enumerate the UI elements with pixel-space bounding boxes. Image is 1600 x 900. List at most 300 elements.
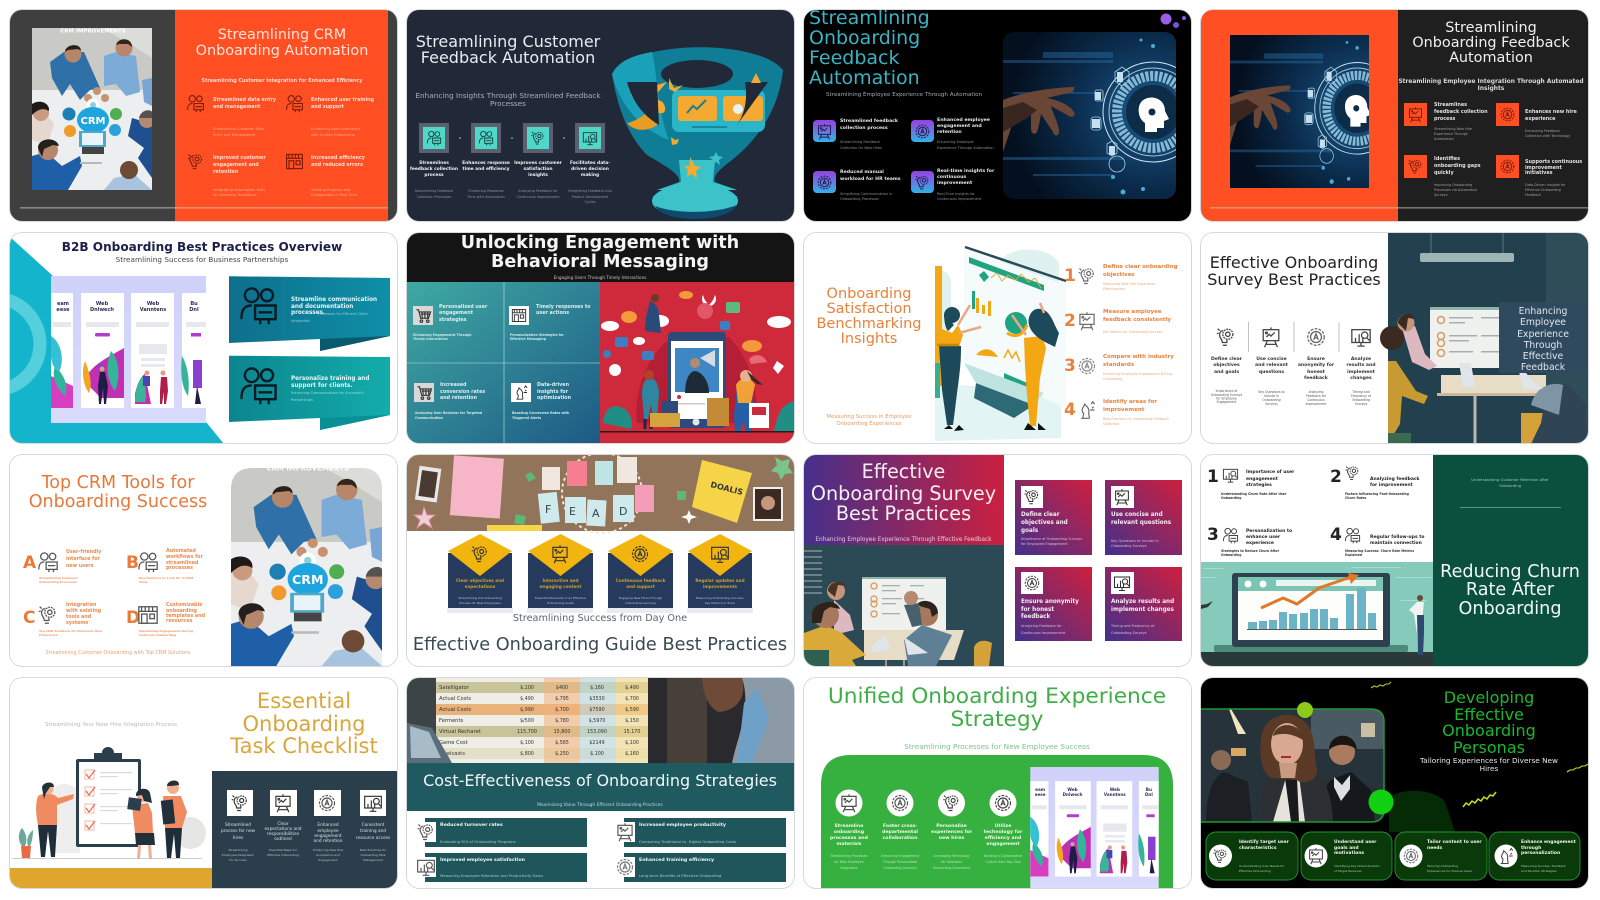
title: Task Checklist	[229, 734, 378, 758]
slide card: Reducing Churn Rate After Onboarding	[1201, 455, 1588, 666]
four survey columns: Use concise	[1256, 356, 1287, 362]
four gold-and-navy cards: Process for New Employees	[459, 601, 501, 605]
lettered tools grid: resources	[166, 618, 193, 624]
strategy columns: onboarding	[834, 828, 864, 834]
persona steps: of Target Personas	[1334, 868, 1362, 872]
photo: spreadsheet and businessman: Game Cost	[439, 740, 468, 746]
dark checklist panel: Enhanced	[317, 822, 339, 828]
numbered list: Best Practices for Onboarding Feedback	[1103, 416, 1169, 420]
green panel	[821, 754, 1173, 888]
numbered list	[1064, 264, 1178, 426]
strategy columns	[830, 789, 1023, 870]
callout: enhancing employee experience: Experience	[1517, 328, 1569, 340]
numbered strategies: Churn Rates	[1345, 496, 1367, 500]
photo: corkboard with sticky notes: A	[592, 507, 600, 520]
slide card: Effective Onboarding Guide Best Practices	[407, 455, 794, 666]
photo: spreadsheet and businessman: 153,090	[587, 728, 607, 734]
four survey columns: Define clear	[1211, 356, 1243, 362]
decorative squiggles	[1371, 682, 1588, 806]
step labels: Collection Processes	[417, 195, 452, 199]
benefit grid	[188, 96, 375, 197]
persona steps: Understanding User Needs for	[1239, 864, 1285, 868]
banner: communication	[229, 276, 390, 350]
four survey columns: Timing and	[1351, 390, 1370, 394]
strategy columns: Integration	[840, 866, 858, 870]
numbered list: feedback consistently	[1103, 316, 1171, 322]
numbered list: Key Metrics for Onboarding Success	[1103, 330, 1163, 334]
four survey columns: results and	[1346, 362, 1376, 368]
practice cards: feedback	[1021, 614, 1051, 620]
numbered strategies: Measuring Success: Churn Rate Metrics	[1345, 549, 1414, 553]
lettered tools grid: Integration	[66, 602, 97, 608]
strategy columns: Culture from Day One	[986, 860, 1020, 864]
step labels: Product Development	[572, 195, 609, 199]
slide card: Developing Effective Onboarding Personas	[1201, 678, 1588, 888]
lettered tools grid: streamlined	[166, 560, 199, 566]
benefit grid: Simplifying Communication in	[840, 192, 892, 196]
four gold-and-navy cards: Continuous feedback	[616, 578, 666, 583]
numbered strategies: 3	[1207, 525, 1219, 545]
title: Onboarding	[827, 286, 911, 302]
practice cards: for Employee Engagement	[1021, 542, 1068, 546]
slide card: Effective Onboarding Survey Best Practices (photo right)	[1201, 232, 1588, 443]
lettered tools grid: A	[23, 553, 37, 573]
step labels: insights	[528, 172, 548, 178]
slide card: Streamlining Customer Feedback Automation	[407, 10, 794, 220]
strategy columns: technology for	[984, 828, 1023, 834]
dark checklist panel: hires	[233, 834, 244, 840]
strategy columns: Through Personalized	[882, 860, 917, 864]
benefit grid: and support	[311, 104, 345, 110]
benefit grid: Experience Through Automation	[937, 146, 994, 150]
slide card: Streamlining CRM Onboarding Automation	[10, 10, 397, 220]
numbered strategies: Onboarding	[1221, 553, 1241, 557]
practice cards	[1015, 480, 1182, 641]
benefit grid: Real-time insights for	[937, 168, 995, 174]
photo: spreadsheet and businessman: Freelcasts	[439, 750, 465, 756]
step labels: making	[581, 172, 599, 178]
green title panel: Onboarding	[1499, 483, 1522, 488]
dark checklist panel: Streamlined	[225, 822, 251, 828]
photo: spreadsheet and businessman: $,490	[520, 696, 534, 702]
photo: spreadsheet and businessman: $,160	[625, 750, 639, 756]
four survey columns: Surveys	[1265, 402, 1278, 406]
title: Streamlining Customer	[416, 32, 601, 51]
banner: communication: and documentation	[291, 304, 353, 310]
four survey columns: Surveys	[1355, 402, 1368, 406]
photo: spreadsheet and businessman	[407, 678, 794, 762]
four gold-and-navy cards: Interactive and	[542, 578, 579, 583]
strategy columns: Building a Collaborative	[984, 854, 1022, 858]
title: Satisfaction	[826, 300, 912, 316]
lettered tools grid: Onboarding Processes	[39, 580, 77, 584]
title: Onboarding Automation	[196, 43, 368, 59]
banner: communication: Integration	[291, 318, 310, 322]
gold footer band	[10, 868, 212, 888]
photo: spreadsheet and businessman: 15,170	[624, 728, 640, 734]
title band: Cost-Effectiveness of Onboarding Strategies	[423, 770, 777, 790]
benefit grid: initiatives	[1525, 170, 1553, 176]
dark checklist panel: Employee Integration	[222, 852, 254, 856]
four gold-and-navy cards: improvements	[703, 584, 737, 589]
strategy columns: Streamline	[835, 822, 863, 828]
teal grid panel: Timely responses to	[536, 304, 591, 310]
illustration: two women at dashboard	[935, 246, 1066, 440]
title: Automation	[1449, 50, 1533, 66]
teal grid panel: engagement	[439, 310, 474, 316]
dark checklist panel: Streamlining	[228, 848, 248, 852]
subtitle: Hires	[1480, 764, 1499, 772]
benefit cards: Measuring Employee Retention and Productivity Gains	[440, 872, 543, 878]
four gold-and-navy cards: Essential Elements of an Effective	[535, 596, 586, 600]
four survey columns: Analyzing	[1308, 390, 1324, 394]
benefit grid: Onboarding Processes	[840, 197, 879, 201]
subtitle: Streamlining Success for Business Partnerships	[116, 254, 289, 264]
callout: enhancing employee experience: Employee	[1520, 316, 1566, 328]
four survey columns: Feedback for	[1306, 394, 1327, 398]
photo: team around CRM hub	[32, 28, 152, 190]
title band: Enhancing Employee Experience Through Effective Feedback	[815, 537, 992, 543]
lettered tools grid: Experience	[39, 633, 58, 637]
benefit grid: Feedback	[1525, 193, 1541, 197]
photo: spreadsheet and businessman: $,795	[555, 696, 569, 702]
step labels	[410, 160, 612, 204]
lettered tools grid: workflows for	[166, 554, 203, 560]
benefit grid: Improving Onboarding	[1434, 183, 1472, 187]
practice cards: relevant questions	[1111, 520, 1172, 526]
benefit grid	[1404, 102, 1582, 197]
persona steps: Enhance engagement	[1521, 838, 1577, 844]
benefit grid: Enhanced user training	[311, 97, 375, 103]
dark checklist panel: Acceptance and	[316, 852, 340, 856]
illustration: social media phone on red	[600, 282, 794, 444]
benefit grid: improvement	[1525, 165, 1562, 171]
title: Onboarding	[243, 712, 365, 736]
benefit grid: Collection with Technology	[1525, 134, 1570, 138]
persona steps: Identify target user	[1239, 838, 1290, 844]
photo: spreadsheet and businessman: $,100	[520, 740, 534, 746]
four survey columns: Engagement	[1217, 400, 1237, 404]
step labels: Integrating Feedback into	[568, 189, 612, 193]
four survey columns: honest	[1307, 368, 1326, 374]
photo: corkboard with sticky notes: E	[569, 505, 576, 518]
numbered list: improvement	[1103, 406, 1145, 412]
subtitle: Streamlining Your New Hire Integration Process	[45, 722, 177, 728]
numbered list: objectives	[1103, 272, 1135, 278]
dark checklist panel: training and	[360, 828, 386, 834]
step labels: driven decision	[571, 166, 609, 172]
numbered list: Define clear onboarding	[1103, 264, 1178, 270]
teal grid panel: Communication	[415, 416, 444, 420]
step icons	[419, 123, 605, 153]
photo: spreadsheet and businessman: $400	[556, 684, 568, 690]
persona steps: motivations	[1334, 850, 1364, 856]
benefit grid: Increased efficiency	[311, 155, 366, 161]
teal grid panel: Enhancing Engagement Through	[413, 332, 472, 336]
benefit grid: engagement and	[937, 123, 982, 129]
numbered list: Identify areas for	[1103, 398, 1157, 404]
title band: Maximizing Value Through Efficient Onboarding Practices	[537, 802, 663, 808]
slide card: Effective Onboarding Survey Best Practices (gradient)	[804, 455, 1191, 666]
practice cards: Analyze results and	[1111, 599, 1174, 605]
strategy columns: Personalize	[936, 822, 967, 828]
callout: enhancing employee experience: Enhancing	[1519, 306, 1567, 316]
step labels: Enhances response	[462, 160, 510, 166]
banner: personalize: Enhancing Communication for Successful	[291, 390, 364, 394]
numbered list: 1	[1064, 266, 1076, 286]
four survey columns: Onboarding Surveys	[1211, 392, 1243, 396]
green title panel: Rate After	[1466, 580, 1555, 600]
green title panel	[1433, 455, 1588, 666]
orange content panel	[175, 10, 388, 221]
benefit grid: Continuous Improvement	[937, 197, 982, 201]
slide card: Unified Onboarding Experience Strategy	[804, 678, 1191, 888]
persona steps: Identifying Key Characteristics	[1334, 864, 1380, 868]
benefit grid: with Guided Onboarding	[311, 133, 355, 137]
numbered strategies: experience	[1246, 540, 1274, 546]
app mockup screens	[51, 276, 206, 423]
benefit grid: Processes via Automated	[1434, 188, 1477, 192]
lettered tools grid: D	[126, 608, 140, 628]
strategy columns: experiences for	[931, 828, 973, 834]
green title panel: Onboarding	[1458, 599, 1562, 619]
step labels: Facilitates data-	[570, 160, 610, 166]
persona steps: Experiences for Diverse Users	[1427, 868, 1473, 872]
benefit cards: Comparing Traditional vs. Digital Onboarding Costs	[639, 838, 736, 844]
lettered tools grid	[23, 548, 206, 637]
callout: enhancing employee experience: Feedback	[1521, 362, 1566, 372]
benefit grid: Integrating Automation Tools	[213, 188, 265, 192]
title: B2B Onboarding Best Practices Overview	[62, 240, 342, 254]
title band	[407, 762, 794, 810]
dark checklist panel: responsibilities	[267, 830, 300, 836]
slide card: Cost-Effectiveness of Onboarding Strategies	[407, 678, 794, 888]
persona steps: Measuring Success: Feedback	[1521, 864, 1566, 868]
subtitle: Streamlining Employee Integration Through Automated	[1398, 79, 1584, 85]
persona steps: characteristics	[1239, 844, 1277, 850]
photo: spreadsheet and businessman: Satelligator	[439, 684, 470, 690]
benefit grid: collection process	[840, 125, 888, 131]
four gold-and-navy cards: expectations	[465, 584, 496, 589]
photo: spreadsheet and businessman: $,100	[590, 750, 604, 756]
title: Effective Onboarding	[1210, 252, 1378, 272]
title band: Onboarding Survey	[811, 482, 996, 505]
practice cards: Continuous Improvement	[1021, 631, 1066, 635]
benefit grid: Enhances new hire	[1525, 109, 1578, 115]
subtitle: Measuring Success in Employee	[826, 414, 912, 420]
benefit grid	[813, 117, 995, 201]
title: Effective Onboarding Guide Best Practices	[413, 635, 787, 655]
benefit grid: quickly	[1434, 170, 1454, 176]
title: Onboarding	[1442, 720, 1536, 740]
persona steps	[1206, 832, 1580, 880]
benefit grid: Streamlines	[1434, 102, 1467, 108]
subtitle: Engaging Users Through Timely Interactions	[554, 274, 646, 280]
lettered tools grid: Top CRM Solutions for Enhanced User	[39, 629, 103, 633]
benefit grid: Data-Driven Insights for	[1525, 183, 1566, 187]
benefit grid: Tracking Progress and	[310, 188, 350, 192]
four gold-and-navy cards: and support	[626, 584, 655, 589]
practice cards: Use concise and	[1111, 512, 1163, 518]
benefit grid: Experience Through	[1434, 132, 1468, 136]
title: Streamlining	[1445, 20, 1537, 36]
four survey columns: anonymity for	[1298, 362, 1335, 368]
four survey columns: Onboarding	[1352, 398, 1370, 402]
banner: communication: Processes for Efficient Client	[318, 312, 368, 316]
four gold-and-navy cards	[447, 534, 753, 613]
photo: corkboard with sticky notes: DOALIS	[710, 480, 744, 497]
benefit grid: Supports continuous	[1525, 159, 1582, 165]
benefit grid: Real-Time Insights for	[937, 192, 975, 196]
step labels: time and efficiency	[462, 166, 510, 172]
practice cards: objectives and	[1021, 520, 1068, 526]
subtitle: Insights	[1478, 86, 1505, 92]
strategy columns: Onboarding Experience	[933, 866, 970, 870]
four survey columns: Key Questions to	[1258, 390, 1285, 394]
title band: Best Practices	[836, 502, 971, 525]
subtitle: Tailoring Experiences for Diverse New	[1419, 756, 1558, 764]
title: Feedback Automation	[421, 48, 595, 67]
photo: woman in crowd	[1201, 708, 1384, 822]
decorative bubbles	[1160, 14, 1186, 28]
teal grid panel: Personalization Strategies for	[510, 332, 564, 336]
numbered list: Effectiveness	[1103, 286, 1125, 290]
photo: spreadsheet and businessman: 15,800	[554, 728, 570, 734]
step labels: Streamlines	[419, 160, 449, 166]
teal grid panel	[407, 282, 600, 444]
decorative circles	[1297, 702, 1394, 814]
strategy columns: for Seamless	[941, 860, 962, 864]
dark checklist panel: resource access	[356, 834, 391, 840]
strategy columns: Onboarding Journeys	[883, 866, 917, 870]
benefit grid: for Seamless Transitions	[213, 193, 257, 197]
four survey columns: Analyze	[1351, 356, 1371, 362]
benefit grid: onboarding gaps	[1434, 163, 1481, 169]
title: Personas	[1453, 738, 1525, 756]
numbered strategies: for improvement	[1370, 482, 1414, 488]
persona steps: and Iteration Strategies	[1521, 868, 1557, 872]
numbered list: standards	[1103, 362, 1135, 368]
lettered tools grid: templates and	[166, 613, 206, 619]
numbered strategies: 1	[1207, 467, 1219, 487]
benefit grid: Identifies	[1434, 156, 1460, 162]
benefit grid: Enhancing Employee	[937, 140, 974, 144]
banner: personalize	[229, 355, 390, 430]
dark checklist panel: employee	[317, 828, 339, 834]
banner: communication: processes.	[291, 310, 325, 316]
dark checklist panel: Effective Onboarding	[267, 852, 299, 856]
dark checklist panel: Engagement	[318, 858, 338, 862]
dark checklist panel	[212, 770, 397, 888]
lettered tools grid: C	[23, 608, 35, 628]
teal grid panel: user actions	[536, 310, 569, 316]
slide card: Streamlining Onboarding Feedback Automation (black)	[804, 10, 1191, 220]
dark checklist panel: outlined	[274, 836, 292, 842]
title: Effective	[1454, 704, 1524, 724]
practice cards: Timing and Frequency of	[1110, 624, 1155, 628]
lettered tools grid: B	[126, 553, 139, 573]
lettered tools grid: onboarding	[166, 608, 198, 614]
photo: spreadsheet and businessman: Virtual Recharet	[439, 728, 481, 734]
numbered list: 4	[1064, 400, 1076, 420]
photo: spreadsheet and businessman: $,590	[625, 706, 639, 712]
photo: spreadsheet and businessman: $2149	[589, 740, 605, 746]
benefit grid: workload for HR teams	[840, 176, 901, 182]
numbered strategies: 4	[1330, 525, 1342, 545]
title: Streamlining CRM	[218, 27, 346, 43]
teal grid panel: Data-driven	[537, 382, 570, 388]
slide card: Essential Onboarding Task Checklist	[10, 678, 397, 888]
benefit grid: Streamlined feedback	[840, 118, 899, 124]
four survey columns: Onboarding	[1262, 398, 1281, 402]
photo: meeting room	[1380, 232, 1588, 444]
step labels: Continuous Improvement	[516, 195, 560, 199]
strategy columns: engagement	[986, 840, 1020, 846]
strategy columns: collaboration	[883, 834, 917, 840]
persona steps: Tailor content to user	[1427, 838, 1482, 844]
benefit cards: Enhanced training efficiency	[639, 856, 714, 862]
lettered tools grid: Customizable	[166, 602, 203, 608]
title band	[804, 455, 1004, 545]
numbered strategies: Personalization to	[1246, 528, 1292, 534]
title: Behavioral Messaging	[491, 252, 709, 272]
photo: hand reaching toward AI head	[1003, 32, 1176, 199]
four gold-and-navy cards: Key Metrics to Track	[705, 601, 735, 605]
photo: team around CRM hub	[231, 465, 386, 666]
photo: spreadsheet and businessman: $7590	[589, 706, 605, 712]
photo: spreadsheet and businessman: $,150	[625, 718, 639, 724]
illustration: trophy with dashboard	[612, 47, 783, 219]
benefit grid: Collection for New Hires	[840, 146, 882, 150]
app mockup screens	[1030, 767, 1159, 888]
benefit grid: Surveys	[1434, 193, 1448, 197]
four survey columns	[1211, 322, 1376, 406]
teal grid panel: Analyzing User Behavior for Targeted	[415, 410, 483, 414]
numbered list: 2	[1064, 310, 1076, 330]
teal grid panel: Effective Messaging	[510, 336, 547, 340]
title: Essential	[257, 688, 351, 712]
four survey columns: for Employee	[1216, 396, 1237, 400]
dark checklist panel: expectations and	[264, 826, 302, 832]
numbered strategies	[1207, 467, 1424, 557]
numbered list: Measuring New Hire Experience	[1103, 282, 1156, 286]
practice cards: goals	[1021, 528, 1039, 534]
teal grid panel: optimization	[537, 394, 572, 400]
four survey columns: changes	[1350, 374, 1372, 380]
benefit grid: feedback collection	[1434, 109, 1488, 115]
photo: spreadsheet and businessman: $/500	[520, 718, 534, 724]
numbered strategies: Regular follow-ups to	[1370, 534, 1424, 540]
slide card: Streamlining Onboarding Feedback Automation (orange)	[1201, 10, 1588, 220]
slide card: B2B Onboarding Best Practices Overview	[10, 232, 397, 443]
title: Survey Best Practices	[1207, 270, 1381, 288]
benefit grid: Entry and Management	[213, 133, 256, 137]
teal grid panel: insights for	[537, 388, 569, 394]
footer caption: Streamlining Customer Onboarding with Top CRM Solutions	[46, 650, 191, 656]
photo: spreadsheet and businessman: $,5970	[589, 718, 605, 724]
lettered tools grid: interface for	[66, 556, 100, 562]
benefit grid: improvement	[937, 180, 973, 186]
subtitle: Streamlining Success from Day One	[513, 613, 687, 624]
photo: corkboard with sticky notes: D	[619, 505, 627, 518]
photo: spreadsheet and businessman: $,490	[625, 684, 639, 690]
subtitle: Streamlining Customer Integration for Enhanced Efficiency	[202, 78, 363, 84]
lettered tools grid: with existing	[66, 608, 102, 614]
strategy columns: Utilize	[995, 822, 1011, 828]
teal grid panel: Triggered Alerts	[512, 416, 541, 420]
persona steps: goals and	[1334, 844, 1359, 850]
dark checklist panel: Management	[363, 858, 384, 862]
